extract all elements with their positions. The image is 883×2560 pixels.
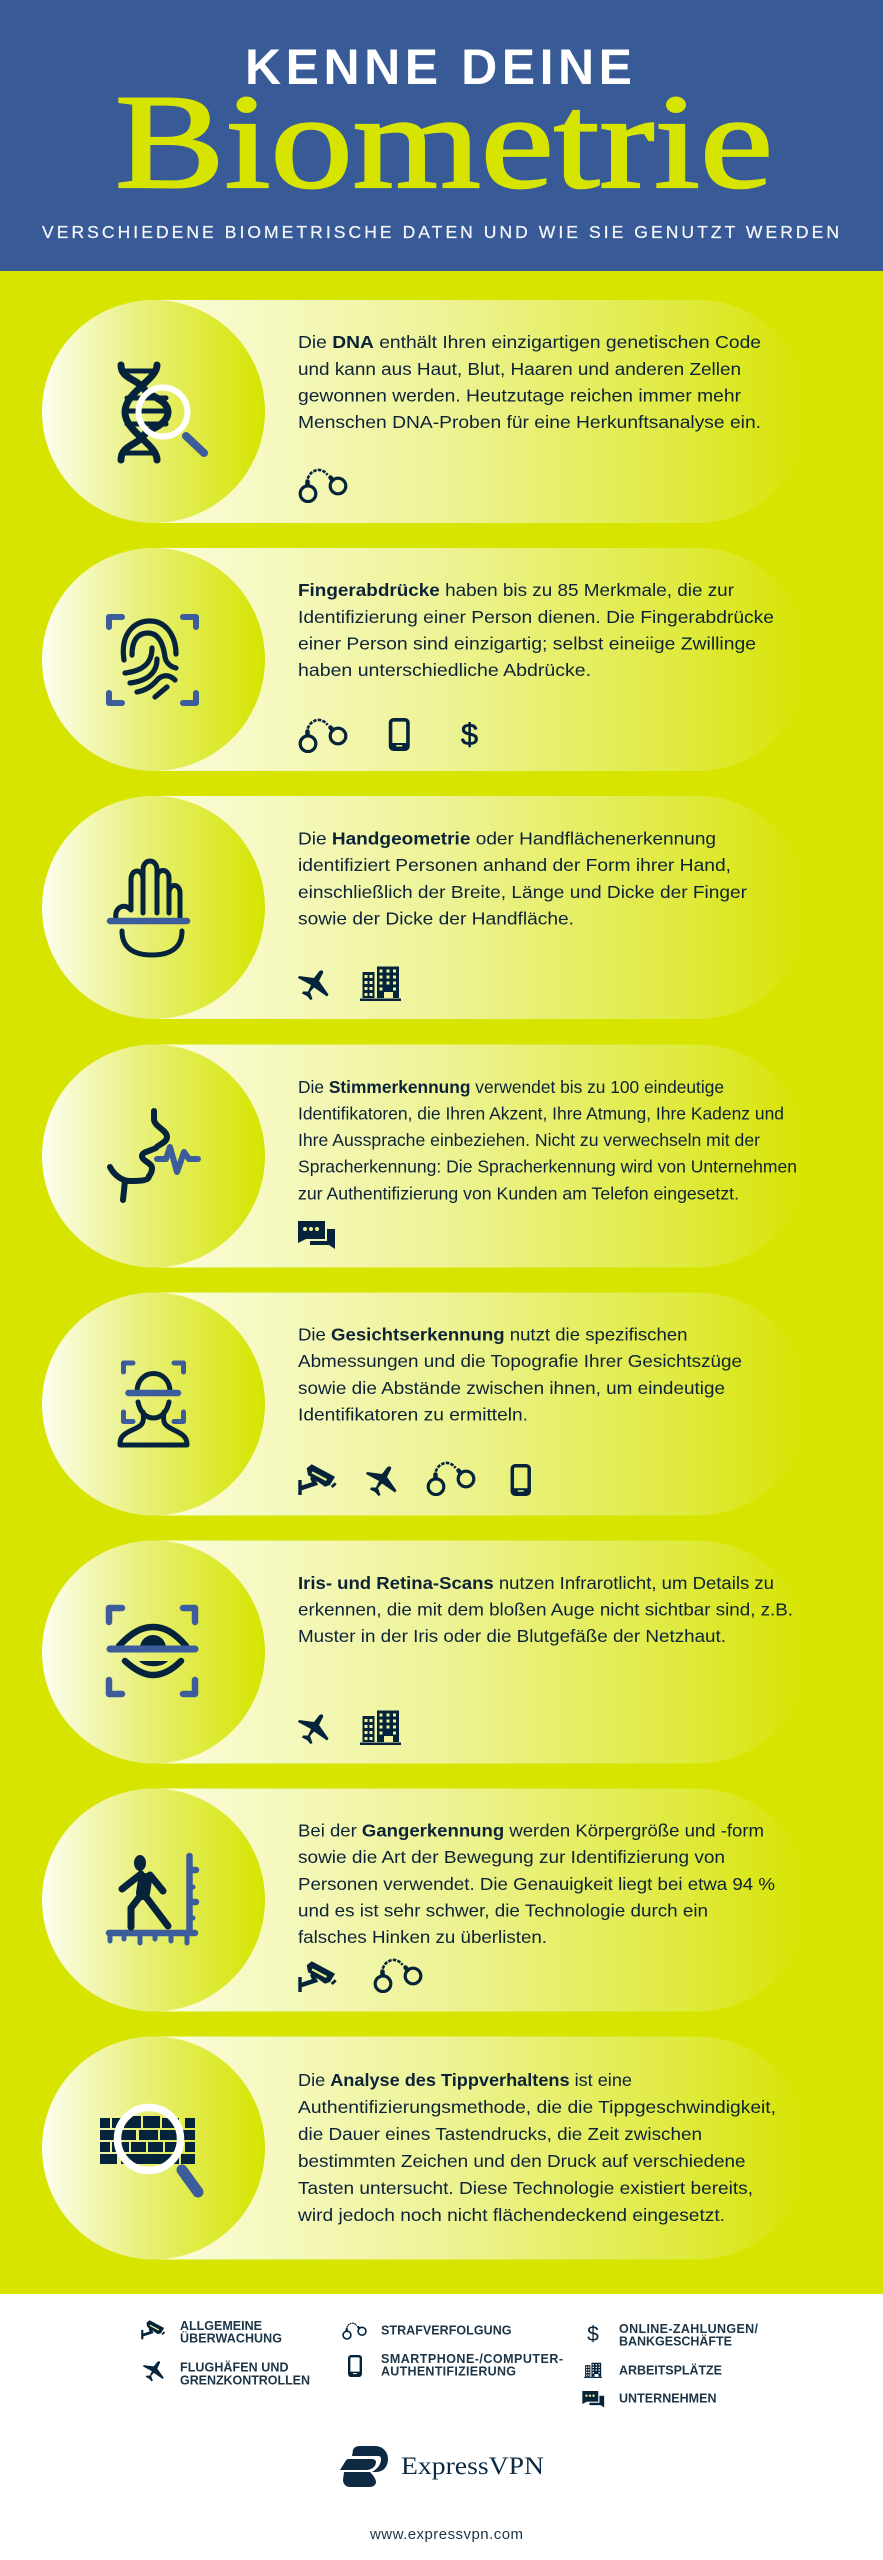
icon: chat bubbles [298,1221,335,1249]
legend item: airports and border control: GRENZKONTROLLEN [180,2374,310,2388]
logo: ExpressVPN: ExpressVPN [401,2453,544,2480]
legend panel [0,2294,883,2560]
icon: keyboard with magnifier [100,2108,198,2192]
description: face recognition: Abmessungen und die Topografie Ihrer Gesichtszüge [298,1351,742,1371]
legend item: online payments and banking [587,2322,759,2348]
description: voice recognition: Ihre Aussprache einbeziehen. Nicht zu verwechseln mit der [298,1130,760,1150]
legend item: general surveillance [142,2319,282,2346]
icon: airplane [298,970,328,1000]
description: gait recognition: falsches Hinken zu überlisten. [298,1927,547,1947]
description: typing analysis: wird jedoch noch nicht flächendeckend eingesetzt. [297,2205,725,2225]
description: hand geometry: sowie der Dicke der Handfläche. [298,908,574,928]
icon: handcuffs [300,720,346,752]
header panel [0,0,883,271]
icon: office building [360,966,401,1001]
icon: handcuffs [300,470,346,502]
description: typing analysis: Die Analyse des Tippverhaltens ist eine [298,2070,632,2090]
icon: voice profile [110,1111,198,1200]
icon: DNA with magnifier [121,365,204,460]
icon: hand scan [110,861,187,955]
panel: face recognition [42,1292,810,1516]
description: typing analysis: Authentifizierungsmethode, die die Tippgeschwindigkeit, [298,2097,776,2117]
legend item: smartphone and computer authentication [349,2352,563,2378]
legend item: online payments and banking: $ [587,2323,599,2346]
description: gait recognition: und es ist sehr schwer, die Technologie durch ein [298,1900,708,1920]
description: DNA [298,332,761,432]
description: hand geometry: einschließlich der Breite, Länge und Dicke der Finger [298,882,747,902]
legend item: smartphone and computer authentication: SMARTPHONE-/COMPUTER- [381,2352,563,2366]
legend item: general surveillance: ÜBERWACHUNG [180,2330,282,2346]
icon: airplane [366,1466,396,1496]
description: face recognition: Die Gesichtserkennung nutzt die spezifischen [298,1324,688,1344]
description: fingerprints: Identifizierung einer Person dienen. Die Fingerabdrücke [298,607,774,627]
legend item: online payments and banking: BANKGESCHÄFTE [619,2334,732,2348]
icon: dollar: $ [461,717,478,752]
description: iris and retina: erkennen, die mit dem bloßen Auge nicht sichtbar sind, z.B. [298,1600,793,1620]
icon: eye scan [109,1608,195,1694]
description: face recognition: Identifikatoren zu ermitteln. [298,1404,528,1424]
panel: DNA [42,300,810,523]
legend item: airports and border control [143,2360,310,2388]
description: voice recognition: Die Stimmerkennung verwendet bis zu 100 eindeutige [298,1077,724,1097]
description: typing analysis: Tasten untersucht. Diese Technologie existiert bereits, [298,2178,753,2198]
description: hand geometry: Die Handgeometrie oder Handflächenerkennung [298,828,716,848]
description: DNA: Die DNA enthält Ihren einzigartigen genetischen Code [298,332,761,352]
description: iris and retina: Muster in der Iris oder die Blutgefäße der Netzhaut. [298,1626,726,1646]
subtitle: VERSCHIEDENE BIOMETRISCHE DATEN UND WIE SIE GENUTZT WERDEN [42,222,839,242]
description: voice recognition [298,1077,797,1204]
icon: surveillance camera [300,1961,336,1992]
icon: fingerprint [109,617,196,703]
icon: smartphone [512,1466,529,1494]
description: voice recognition: Spracherkennung: Die Spracherkennung wird von Unternehmen [298,1156,797,1176]
description: iris and retina: Iris- und Retina-Scans nutzen Infrarotlicht, um Details zu [298,1573,774,1593]
legend item: businesses: UNTERNEHMEN [619,2392,716,2406]
legend item: law enforcement [343,2323,512,2339]
legend item: online payments and banking: ONLINE-ZAHLUNGEN/ [619,2322,759,2336]
legend item: airports and border control: FLUGHÄFEN UND [180,2360,288,2374]
icon: office building [360,1710,401,1745]
icon: smartphone [391,720,408,749]
icon: face scan [120,1363,187,1445]
description: voice recognition: zur Authentifizierung von Kunden am Telefon eingesetzt. [298,1184,739,1204]
description: hand geometry [298,828,747,928]
description: face recognition [298,1324,742,1424]
description: gait recognition: Bei der Gangerkennung werden Körpergröße und -form [298,1820,764,1840]
description: fingerprints: Fingerabdrücke haben bis zu 85 Merkmale, die zur [298,580,734,600]
panel: hand geometry [42,796,810,1019]
description: fingerprints: einer Person sind einzigartig; selbst eineiige Zwillinge [298,634,756,654]
description: gait recognition [298,1820,775,1947]
icon: handcuffs [375,1960,421,1992]
description: gait recognition: sowie die Art der Bewegung zur Identifizierung von [298,1847,725,1867]
legend item: smartphone and computer authentication: AUTHENTIFIZIERUNG [381,2364,516,2378]
legend item: general surveillance: ALLGEMEINE [180,2319,262,2333]
description: DNA: Menschen DNA-Proben für eine Herkunftsanalyse ein. [298,412,761,432]
description: DNA: gewonnen werden. Heutzutage reichen immer mehr [298,386,741,406]
description: fingerprints: haben unterschiedliche Abdrücke. [298,660,591,680]
icon: surveillance camera [300,1464,336,1495]
description: iris and retina [298,1573,793,1646]
description: typing analysis: bestimmten Zeichen und den Druck auf verschiedene [298,2151,746,2171]
description: typing analysis [297,2070,776,2225]
description: gait recognition: Personen verwendet. Die Genauigkeit liegt bei etwa 94 % [298,1874,775,1894]
panel: gait recognition [42,1788,810,2012]
panel: iris and retina [42,1540,810,1764]
logo: ExpressVPN [340,2446,544,2487]
title line: Biometrie: Biometrie [115,68,773,217]
legend item: businesses [582,2391,716,2408]
icon: airplane [298,1714,328,1744]
icon: walking figure with ruler [109,1855,196,1943]
legend item: workplaces: ARBEITSPLÄTZE [619,2362,722,2378]
description: voice recognition: Identifikatoren, die Ihren Akzent, Ihre Atmung, Ihre Kadenz und [298,1104,784,1124]
website address: www.expressvpn.com [369,2526,523,2543]
title line: Kenne deine: KENNE DEINE [245,39,632,95]
panel: voice recognition [42,1044,810,1268]
legend item: law enforcement: STRAFVERFOLGUNG [381,2324,512,2338]
icon: handcuffs [428,1463,474,1494]
description: face recognition: sowie die Abstände zwischen ihnen, um eindeutige [298,1378,725,1398]
description: fingerprints [298,580,774,680]
description: hand geometry: identifiziert Personen anhand der Form ihrer Hand, [298,855,731,875]
description: DNA: und kann aus Haut, Blut, Haaren und anderen Zellen [298,359,741,379]
legend item: workplaces [584,2362,722,2378]
panel: typing analysis [42,2036,810,2260]
panel: fingerprints [42,548,810,771]
description: typing analysis: die Dauer eines Tastendrucks, die Zeit zwischen [298,2124,702,2144]
